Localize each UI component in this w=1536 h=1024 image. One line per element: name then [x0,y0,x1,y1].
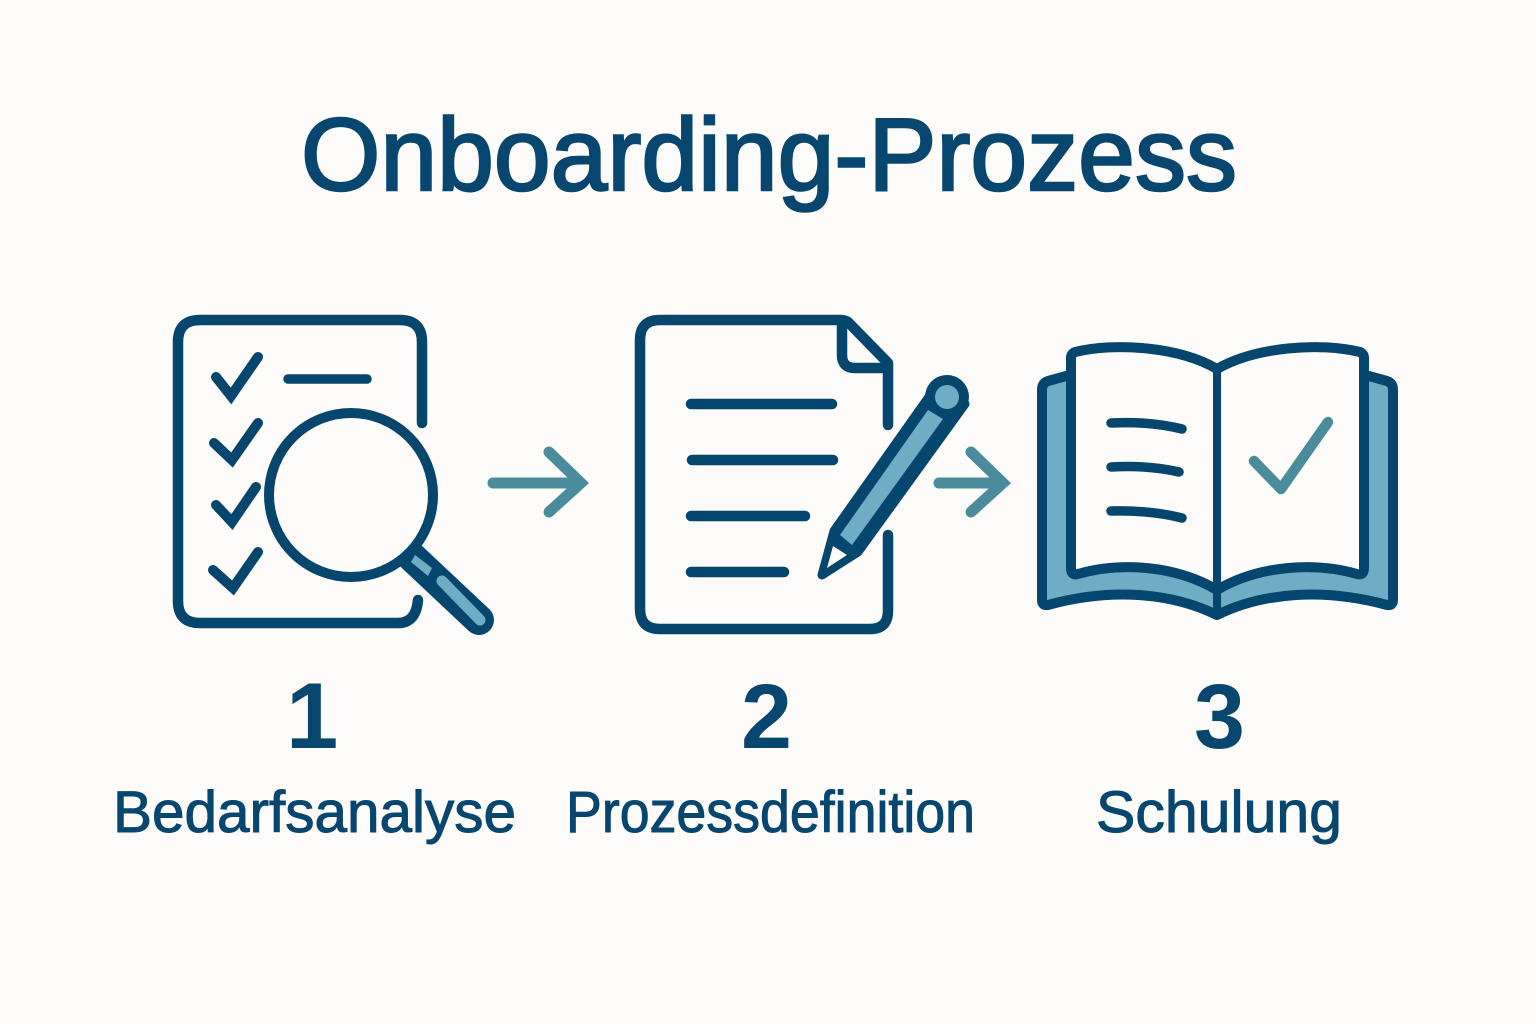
title: Onboarding-Prozess [301,97,1237,212]
document text lines [691,404,833,572]
step 1 number: 1 [286,663,338,768]
icon: open book [1042,347,1393,616]
arrow: step 2 to step 3 [939,452,1003,512]
icon: checklist with magnifying glass [178,320,480,623]
document fold [842,322,887,368]
book text lines [1111,423,1182,518]
arrow: step 1 to step 2 [493,452,581,512]
step 3 number: 3 [1194,666,1245,768]
book check mark [1254,422,1328,489]
book cover [1042,375,1393,615]
checklist text line [288,374,367,384]
step 2 number: 2 [741,666,792,768]
document outline [640,320,888,629]
icon: document with pencil [640,320,969,629]
book spine [1213,369,1221,616]
checklist page outline [178,320,422,623]
magnifier handle [411,555,480,620]
magnifier lens [269,413,433,577]
checklist marks [213,357,258,588]
pencil [822,375,969,575]
step 1 label: Bedarfsanalyse [113,780,516,845]
book pages [1071,347,1364,590]
step 2 label: Prozessdefinition [566,780,975,845]
step 3 label: Schulung [1096,780,1342,845]
